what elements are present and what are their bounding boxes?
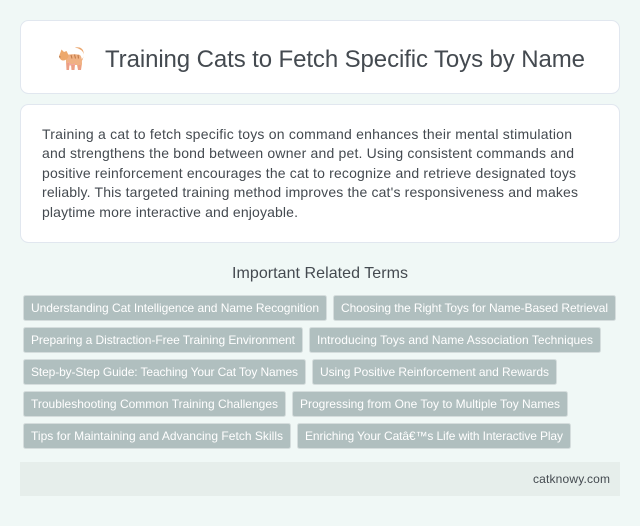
tag 5 bbox=[24, 360, 306, 384]
tag 6 bbox=[312, 360, 556, 384]
heading: related terms: Important Related Terms bbox=[232, 265, 408, 282]
footer bbox=[20, 462, 620, 496]
tag 2 bbox=[334, 296, 616, 320]
tag 5: Step-by-Step Guide: Teaching Your Cat Toy Names bbox=[31, 365, 298, 379]
tag 3 bbox=[24, 328, 302, 352]
panel: description bbox=[20, 104, 620, 242]
description text: playtime more interactive and enjoyable. bbox=[42, 204, 298, 220]
tag 3: Preparing a Distraction-Free Training Environment bbox=[31, 333, 296, 347]
tag 9: Tips for Maintaining and Advancing Fetch Skills bbox=[31, 429, 283, 443]
description text bbox=[42, 126, 578, 220]
tag 7 bbox=[24, 392, 286, 416]
tag 9 bbox=[24, 424, 290, 448]
tag 1: Understanding Cat Intelligence and Name Recognition bbox=[31, 301, 319, 315]
tag 2: Choosing the Right Toys for Name-Based Retrieval bbox=[341, 301, 608, 315]
tag 6: Using Positive Reinforcement and Rewards bbox=[320, 365, 549, 379]
icon: cat bbox=[59, 47, 84, 70]
description text: and strengthens the bond between owner and pet. Using consistent commands and bbox=[42, 145, 574, 161]
tag 4 bbox=[310, 328, 600, 352]
tag 10 bbox=[298, 424, 570, 448]
tag 4: Introducing Toys and Name Association Techniques bbox=[317, 333, 593, 347]
tag 7: Troubleshooting Common Training Challenges bbox=[31, 397, 278, 411]
tag 8: Progressing from One Toy to Multiple Toy Names bbox=[300, 397, 560, 411]
description text: positive reinforcement encourages the cat to recognize and retrieve designated toys bbox=[42, 165, 576, 181]
tag 1 bbox=[24, 296, 326, 320]
tag 10: Enriching Your Catâ€™s Life with Interactive Play bbox=[305, 429, 563, 443]
panel: title header bbox=[20, 20, 620, 94]
tag list bbox=[24, 296, 616, 448]
title: Training Cats to Fetch Specific Toys by Name bbox=[105, 46, 585, 73]
tag 8 bbox=[292, 392, 568, 416]
description text: reliably. This targeted training method improves the cat's responsiveness and makes bbox=[42, 184, 578, 200]
footer site name: catknowy.com bbox=[533, 472, 610, 486]
description text: Training a cat to fetch specific toys on command enhances their mental stimulation bbox=[42, 126, 572, 142]
